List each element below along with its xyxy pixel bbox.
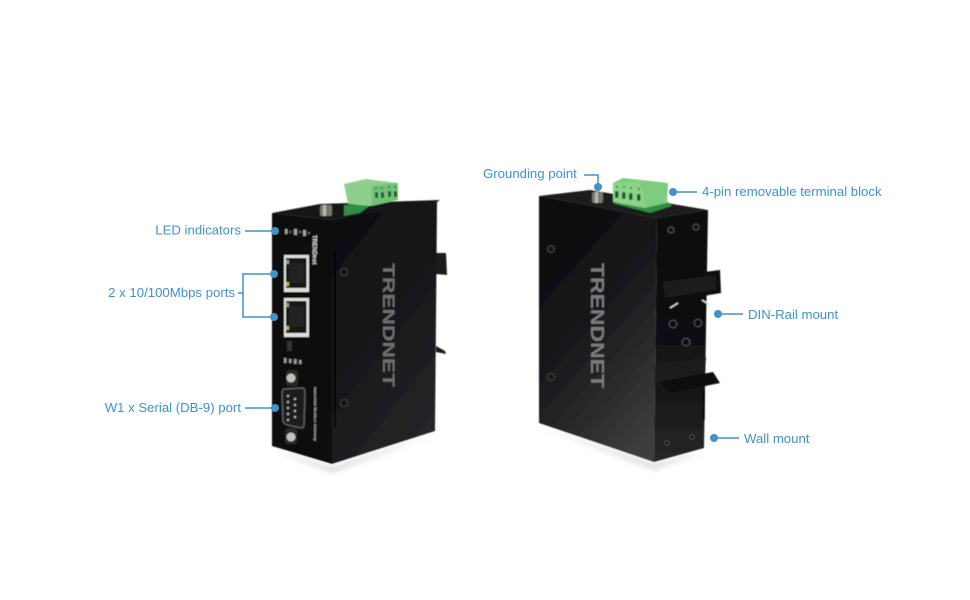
upper DIN clip — [658, 270, 721, 308]
front brand: TRENDnet — [310, 235, 316, 265]
side logo: TRENDNET — [587, 263, 607, 388]
label: 2 x 10/100Mbps ports: 2 x 10/100Mbps ports — [108, 285, 235, 300]
serial port: Industrial Modbus Gateway — [313, 387, 318, 442]
label: Wall mount — [710, 431, 810, 446]
label: Grounding point: Grounding point — [483, 166, 577, 181]
side panel — [332, 201, 437, 464]
din clips behind — [436, 253, 447, 275]
left device: front view of switch — [272, 179, 447, 472]
serial port — [282, 370, 318, 444]
LED marks — [285, 229, 310, 236]
lower DIN clip — [655, 357, 720, 393]
status marks — [284, 358, 302, 364]
side screws — [548, 246, 554, 252]
label: LED indicators: LED indicators — [155, 222, 241, 238]
RJ45 ports — [284, 255, 309, 337]
side screws — [340, 268, 348, 276]
right device: back view of switch — [539, 178, 721, 469]
label: 2 x 10/100Mbps ports — [108, 270, 278, 321]
terminal block — [344, 179, 398, 206]
label: Wall mount: Wall mount — [744, 431, 810, 446]
grounding screw — [592, 192, 603, 203]
terminal block — [613, 178, 668, 208]
label: serial port: W1 x Serial (DB-9) port — [105, 400, 241, 415]
label: LED indicators — [155, 222, 279, 238]
label: DIN-Rail mount: DIN-Rail mount — [748, 307, 838, 322]
large side panel — [539, 196, 657, 462]
top face — [539, 190, 708, 218]
small switch — [287, 341, 292, 351]
side logo: TRENDNET — [379, 263, 398, 388]
front face — [272, 213, 332, 464]
label: Grounding point — [483, 166, 602, 191]
back face — [654, 210, 708, 462]
label: terminal block: 4-pin removable terminal block — [702, 184, 882, 199]
side groove — [334, 250, 336, 427]
back screws — [665, 224, 702, 445]
green reflection on top — [344, 204, 372, 216]
top face — [272, 200, 440, 220]
grounding screw — [320, 205, 332, 216]
